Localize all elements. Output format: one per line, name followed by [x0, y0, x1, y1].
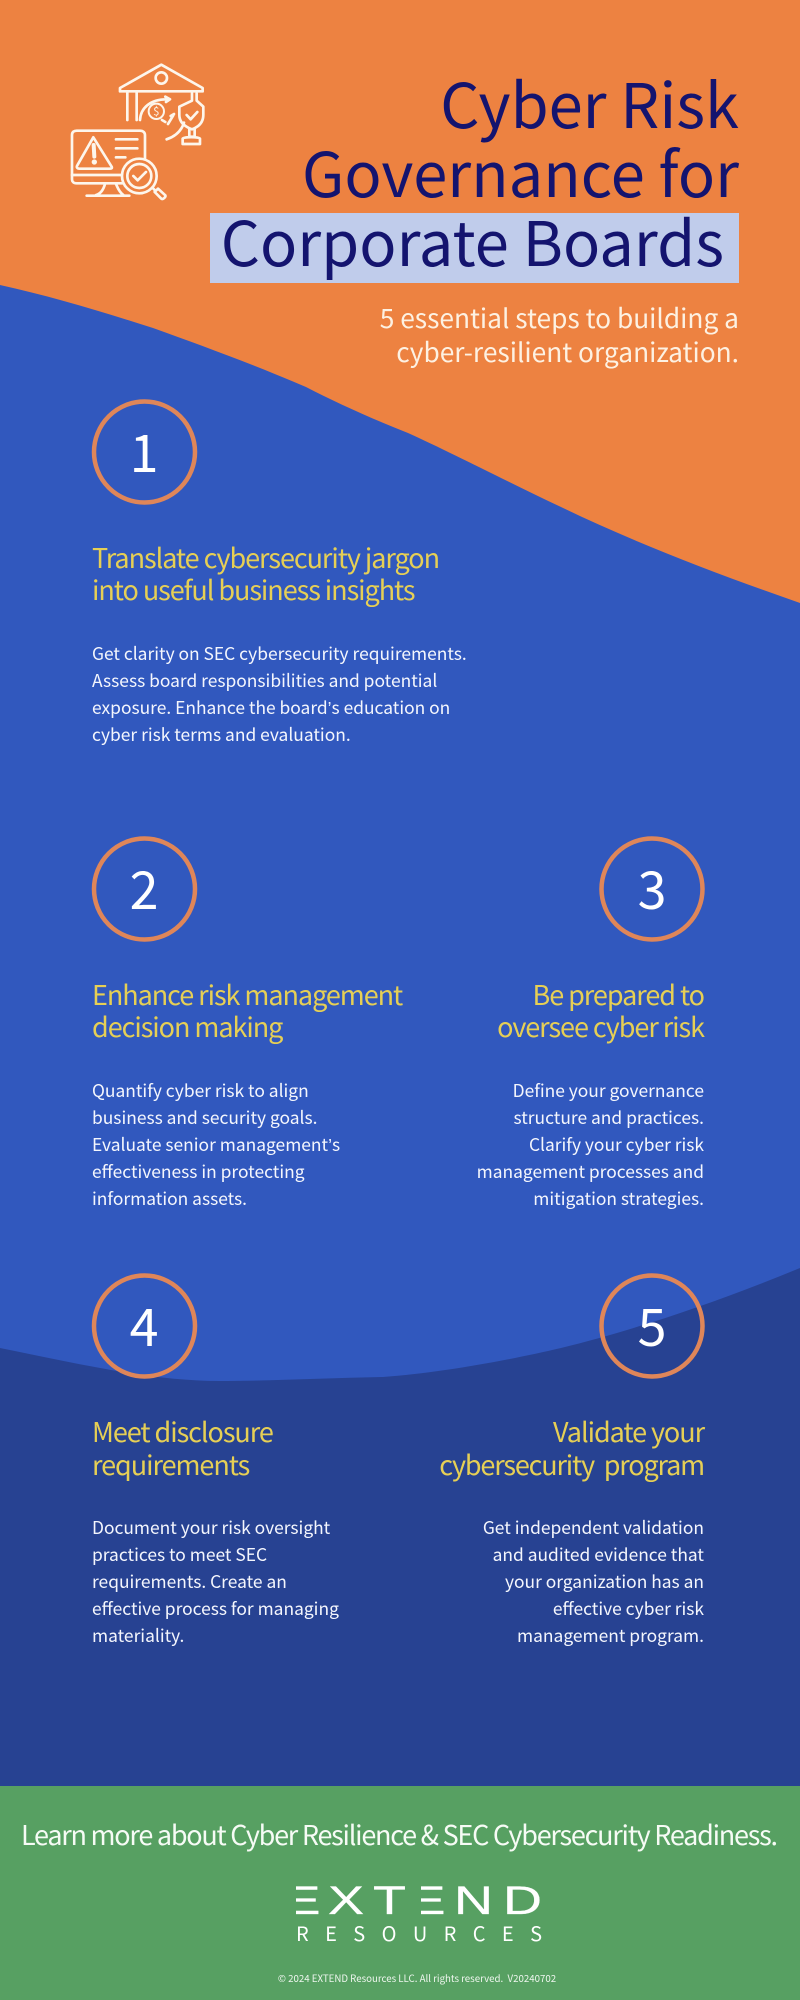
- step 2: effectiveness in protecting: [92, 1159, 305, 1184]
- step 4: Document your risk oversight: [92, 1515, 331, 1540]
- subtitle: cyber-resilient organization.: [396, 331, 739, 370]
- title highlight: [210, 213, 739, 283]
- step 2: 2: [130, 849, 158, 924]
- step 1: Get clarity on SEC cybersecurity requirements.: [92, 641, 467, 666]
- step 3: [477, 838, 705, 1211]
- title: Governance for: [302, 126, 739, 215]
- step 3: Define your governance: [513, 1078, 704, 1103]
- subtitle: [380, 297, 739, 370]
- step 1: Assess board responsibilities and potential: [92, 668, 437, 693]
- step 5: your organization has an: [505, 1569, 704, 1594]
- step 1: into useful business insights: [92, 569, 415, 608]
- step 2: [92, 838, 403, 1211]
- step 5: and audited evidence that: [493, 1542, 704, 1567]
- step 2: Quantify cyber risk to align: [92, 1078, 309, 1103]
- step 4: 4: [130, 1286, 158, 1361]
- background: orange wave header: [0, 0, 800, 603]
- step 3: 3: [638, 849, 666, 924]
- step 4: Meet disclosure: [92, 1411, 273, 1450]
- step 4: effective process for managing: [92, 1596, 339, 1621]
- step 5: effective cyber risk: [553, 1596, 704, 1621]
- step 2: Evaluate senior management’s: [92, 1132, 340, 1157]
- step 4: [92, 1276, 339, 1648]
- footer panel: [0, 1786, 800, 2000]
- step 1: cyber risk terms and evaluation.: [92, 722, 351, 747]
- step 3: management processes and: [477, 1159, 704, 1184]
- step 3: mitigation strategies.: [533, 1186, 704, 1211]
- step 4: requirements: [92, 1444, 250, 1483]
- background: dark blue wave: [0, 1268, 800, 1800]
- step 1: [92, 402, 467, 747]
- step 2: decision making: [92, 1006, 283, 1045]
- step 1: 1: [130, 412, 158, 487]
- step 5: Validate your: [553, 1411, 706, 1450]
- logo: EXTEND Resources: RESOURCES: [296, 1918, 542, 1947]
- step 1: Translate cybersecurity jargon: [92, 537, 439, 576]
- title: Cyber Risk: [440, 57, 739, 146]
- subtitle: 5 essential steps to building a: [380, 297, 739, 336]
- step 3: Clarify your cyber risk: [529, 1132, 704, 1157]
- step 5: [439, 1276, 706, 1648]
- step 1: exposure. Enhance the board’s education on: [92, 695, 450, 720]
- logo: EXTEND Resources: [283, 1879, 542, 1947]
- title: Corporate Boards: [221, 195, 724, 284]
- call to action: Learn more about Cyber Resilience & SEC Cybersecurity Readiness.: [21, 1814, 778, 1853]
- step 3: Be prepared to: [532, 974, 704, 1013]
- step 5: cybersecurity program: [439, 1444, 704, 1483]
- copyright: © 2024 EXTEND Resources LLC. All rights reserved. V20240702: [278, 1971, 556, 1985]
- icon: bank, shield and monitor with warning: $: [153, 103, 159, 119]
- step 5: management program.: [517, 1623, 704, 1648]
- step 5: 5: [638, 1286, 666, 1361]
- step 2: information assets.: [92, 1186, 247, 1211]
- step 4: practices to meet SEC: [92, 1542, 267, 1567]
- icon: bank, shield and monitor with warning: [72, 65, 203, 199]
- step 4: requirements. Create an: [92, 1569, 287, 1594]
- title: [210, 57, 739, 284]
- step 3: oversee cyber risk: [497, 1006, 705, 1045]
- step 5: Get independent validation: [483, 1515, 704, 1540]
- logo: EXTEND Resources: EXTEND: [284, 1879, 542, 1923]
- step 2: Enhance risk management: [92, 974, 403, 1013]
- step 4: materiality.: [92, 1623, 184, 1648]
- step 3: structure and practices.: [514, 1105, 704, 1130]
- step 2: business and security goals.: [92, 1105, 317, 1130]
